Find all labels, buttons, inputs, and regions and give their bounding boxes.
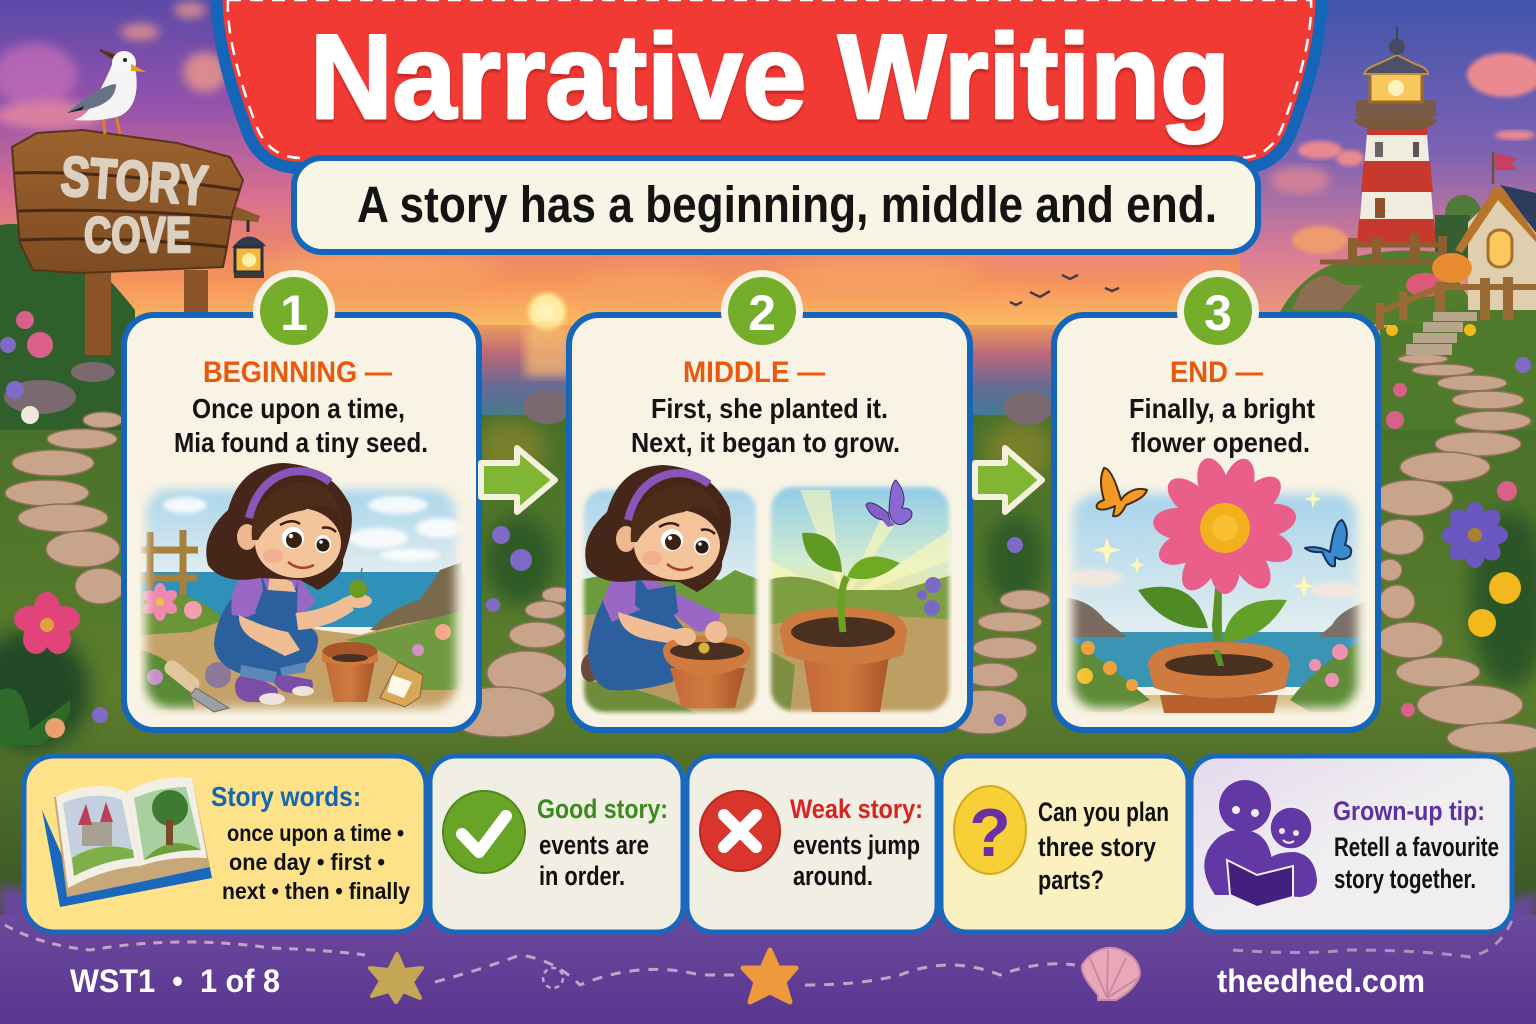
sign: Story Cove: [12, 130, 260, 355]
butterfly orange: [1097, 468, 1147, 516]
badge 1: [253, 270, 335, 352]
sign lettering: STORY: [59, 144, 210, 217]
butterfly blue: [1305, 520, 1351, 566]
Mia kneeling with a seed: [205, 463, 372, 705]
beginning text: [174, 356, 428, 458]
story words text: [211, 781, 410, 904]
butterfly purple: [866, 480, 912, 527]
panel: good story: [430, 756, 683, 932]
beginning text: Once upon a time,: [192, 393, 405, 424]
story words text: next • then • finally: [222, 878, 410, 904]
panel: middle: [569, 270, 970, 730]
panel: story words: [24, 756, 426, 932]
badge 2: [721, 270, 803, 352]
badge 3: 3: [1204, 285, 1232, 341]
question text: three story: [1038, 832, 1156, 862]
grown-up tip text: Grown-up tip:: [1333, 796, 1485, 826]
purple footer band: [0, 885, 1536, 1024]
icon: orange starfish: [743, 950, 796, 1002]
good story text: Good story:: [537, 794, 668, 824]
sign lettering: [59, 144, 210, 263]
icon: shell: [1082, 948, 1140, 1000]
sparkles: [1093, 490, 1322, 598]
panel: grown-up tip: [1191, 756, 1512, 932]
icon: trowel: [172, 668, 229, 712]
weak story text: Weak story:: [790, 794, 923, 824]
panel: weak story: [687, 756, 937, 932]
panel: end: [1054, 270, 1378, 730]
cottage: [1376, 152, 1536, 355]
end text: [1129, 356, 1315, 458]
middle text: [631, 356, 900, 458]
icon: flower in pot: [1138, 455, 1299, 713]
flowers on the ground: [0, 311, 1531, 745]
website: theedhed.com: [1217, 963, 1425, 999]
icon: small pot: [322, 642, 378, 702]
badge 1: 1: [280, 285, 308, 341]
sign lettering: COVE: [84, 207, 191, 263]
icon: pot with seed: [663, 623, 750, 708]
middle text: MIDDLE —: [683, 356, 825, 389]
middle text: First, she planted it.: [651, 393, 888, 424]
weak story text: around.: [793, 861, 873, 891]
icon: cross: [700, 791, 780, 871]
lighthouse: [1280, 27, 1481, 325]
question text: [1038, 797, 1169, 895]
footer code: WST1 • 1 of 8: [70, 963, 280, 999]
good story text: events are: [539, 830, 649, 860]
end text: END —: [1170, 356, 1263, 389]
middle text: Next, it began to grow.: [631, 427, 900, 458]
Mia planting the seed: [581, 465, 731, 690]
badge 2: 2: [748, 285, 776, 341]
weak story text: [790, 794, 923, 891]
arrow 2: [975, 448, 1042, 512]
scene: garden background: [580, 482, 760, 716]
story words text: Story words:: [211, 781, 361, 812]
good story text: [537, 794, 668, 891]
scene: sprout in pot: [768, 482, 952, 716]
subtitle: [294, 158, 1258, 252]
scene: beach background: [140, 482, 465, 715]
grown-up tip text: story together.: [1334, 864, 1476, 894]
subtitle: A story has a beginning, middle and end.: [357, 176, 1217, 233]
end text: flower opened.: [1131, 427, 1310, 458]
icon: open book: [42, 778, 212, 907]
scene: seaside background: [1066, 486, 1366, 716]
badge 3: [1177, 270, 1259, 352]
icon: sprout in big pot: [780, 533, 907, 712]
icon: check: [443, 791, 525, 873]
grown-up tip text: [1333, 796, 1499, 894]
beginning text: Mia found a tiny seed.: [174, 427, 428, 458]
icon: lantern: [232, 220, 266, 278]
icon: seagull: [67, 50, 146, 134]
question text: Can you plan: [1038, 797, 1169, 827]
story words text: one day • first •: [229, 849, 385, 875]
beginning text: BEGINNING —: [203, 356, 392, 389]
icon: question mark: ?: [969, 795, 1011, 871]
weak story text: events jump: [793, 830, 920, 860]
good story text: in order.: [539, 861, 625, 891]
title banner: [217, 0, 1321, 168]
icon: sand starfish: [370, 954, 422, 1002]
panel: question: [941, 756, 1188, 932]
question text: parts?: [1038, 865, 1104, 895]
title: Narrative Writing: [310, 10, 1230, 144]
story words text: once upon a time •: [227, 820, 404, 846]
icon: seed packet: [380, 662, 423, 707]
arrow 1: [481, 448, 555, 512]
birds: [1010, 275, 1119, 305]
panel: beginning: [124, 270, 479, 730]
end text: Finally, a bright: [1129, 393, 1315, 424]
icon: question mark: [954, 786, 1026, 874]
icon: parent and child reading: [1204, 780, 1317, 907]
